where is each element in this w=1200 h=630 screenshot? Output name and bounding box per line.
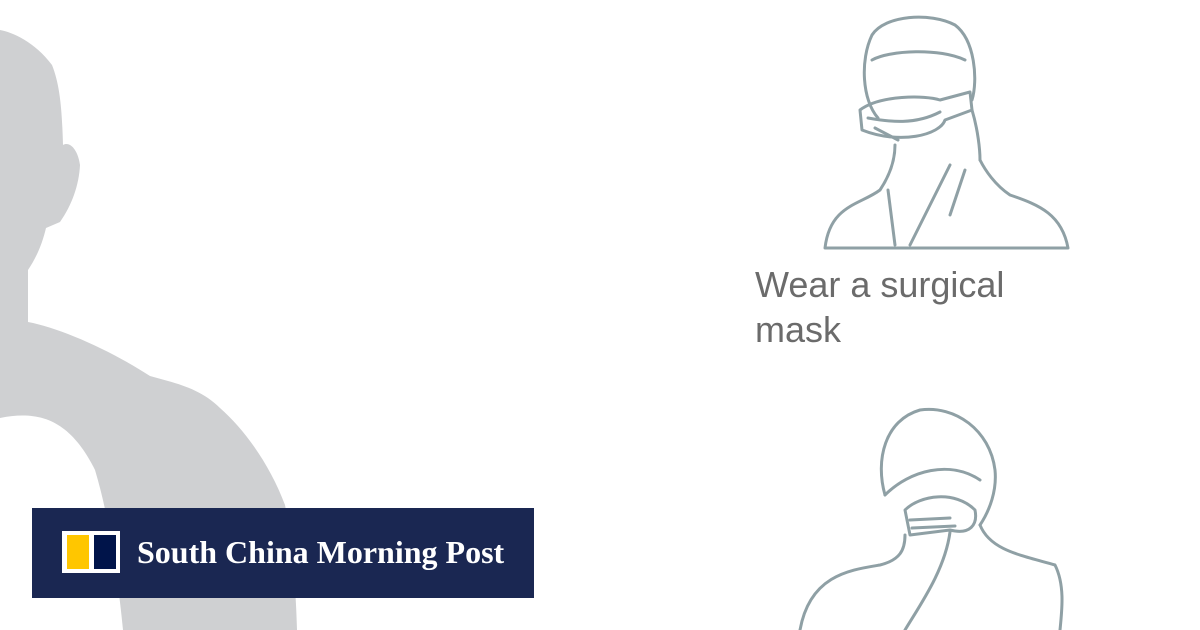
logo text: South China Morning Post — [137, 534, 504, 570]
caption: wear a surgical mask: Wear a surgical — [755, 264, 1004, 305]
icon: logo squares — [62, 531, 120, 573]
caption: wear a surgical mask — [755, 264, 1004, 350]
logo banner: South China Morning Post — [32, 508, 534, 598]
caption: wear a surgical mask: mask — [755, 309, 841, 350]
icon: man wearing surgical mask — [824, 16, 1070, 250]
icon: person covering cough — [798, 408, 1064, 630]
